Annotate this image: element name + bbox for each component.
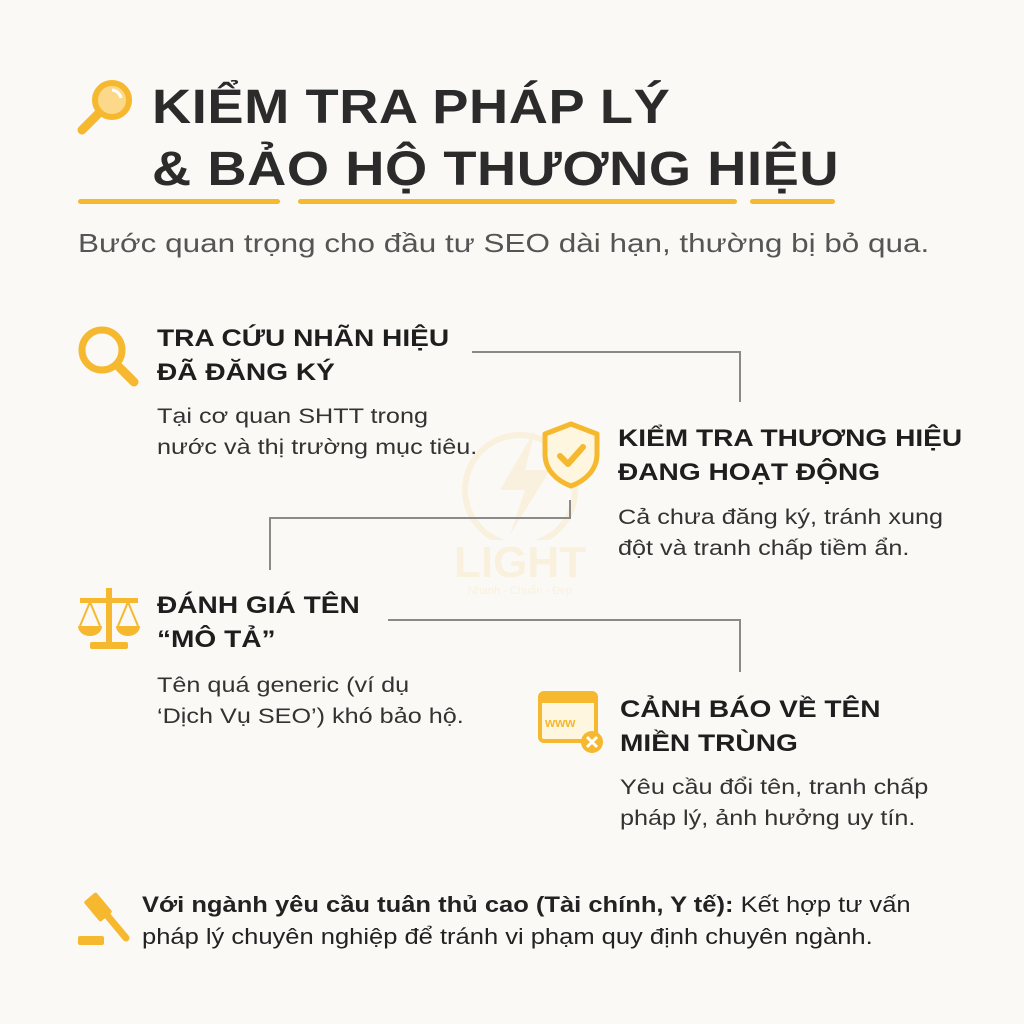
description: nước và thị trường mục tiêu. bbox=[157, 436, 477, 459]
heading: TRA CỨU NHÃN HIỆU bbox=[157, 325, 449, 352]
description bbox=[157, 674, 464, 728]
description: Yêu cầu đổi tên, tranh chấp bbox=[620, 776, 928, 799]
item 1: trademark lookup bbox=[78, 324, 477, 459]
heading: CẢNH BÁO VỀ TÊN bbox=[620, 696, 881, 723]
icon: scale bbox=[78, 588, 140, 649]
watermark bbox=[454, 430, 586, 597]
title underline bbox=[78, 199, 835, 204]
footer text bbox=[142, 892, 911, 949]
item 4: domain warning bbox=[538, 691, 928, 830]
heading bbox=[157, 324, 449, 386]
description bbox=[157, 405, 477, 459]
title: KIỂM TRA PHÁP LÝ bbox=[152, 81, 670, 134]
description: ‘Dịch Vụ SEO’) khó bảo hộ. bbox=[157, 705, 464, 728]
heading: MIỀN TRÙNG bbox=[620, 730, 798, 757]
heading: ĐÁNH GIÁ TÊN bbox=[157, 592, 360, 619]
description: Tại cơ quan SHTT trong bbox=[157, 405, 428, 428]
description: Tên quá generic (ví dụ bbox=[157, 674, 409, 697]
description bbox=[620, 776, 928, 830]
icon: magnifier bbox=[78, 326, 138, 386]
description: pháp lý, ảnh hưởng uy tín. bbox=[620, 807, 915, 830]
heading bbox=[618, 424, 962, 486]
description bbox=[618, 506, 943, 560]
heading: “MÔ TẢ” bbox=[157, 626, 276, 653]
title: & BẢO HỘ THƯƠNG HIỆU bbox=[152, 143, 839, 196]
item 2: active brands bbox=[542, 422, 962, 560]
description: Cả chưa đăng ký, tránh xung bbox=[618, 506, 943, 529]
footer text: Với ngành yêu cầu tuân thủ cao (Tài chính, Y tế): Kết hợp tư vấn bbox=[142, 892, 911, 917]
footer note bbox=[78, 892, 911, 949]
heading bbox=[620, 695, 881, 757]
icon: gavel bbox=[78, 892, 130, 945]
title bbox=[152, 80, 839, 196]
item 3: descriptive names bbox=[78, 588, 464, 728]
description: đột và tranh chấp tiềm ẩn. bbox=[618, 537, 909, 560]
subtitle: Bước quan trọng cho đầu tư SEO dài hạn, thường bị bỏ qua. bbox=[78, 228, 929, 258]
watermark: LIGHT bbox=[454, 538, 586, 587]
heading: ĐÃ ĐĂNG KÝ bbox=[157, 359, 335, 386]
heading: KIỂM TRA THƯƠNG HIỆU bbox=[618, 425, 962, 452]
footer text: pháp lý chuyên nghiệp để tránh vi phạm quy định chuyên ngành. bbox=[142, 924, 873, 949]
icon: title magnifier bbox=[78, 80, 132, 134]
watermark: Nhanh - Chuẩn - Đẹp bbox=[468, 585, 572, 597]
icon: www window: www bbox=[544, 715, 576, 730]
heading bbox=[157, 591, 360, 653]
heading: ĐANG HOẠT ĐỘNG bbox=[618, 459, 880, 486]
icon: www window bbox=[538, 691, 603, 753]
icon: shield bbox=[542, 422, 600, 488]
